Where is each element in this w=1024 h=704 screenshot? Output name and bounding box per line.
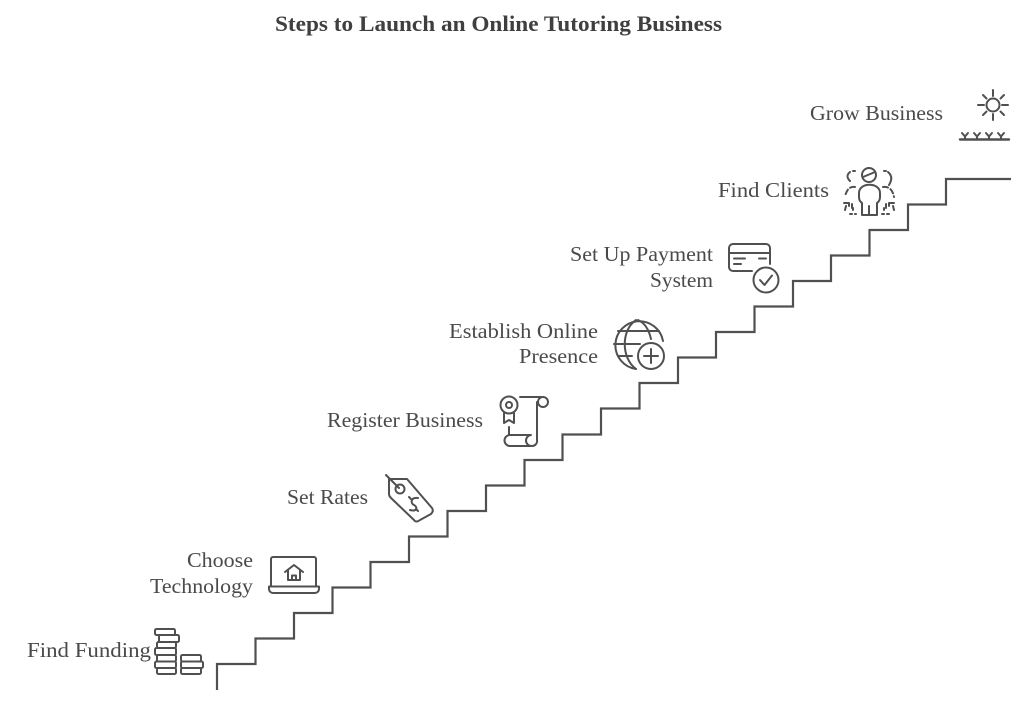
label: Establish Online Presence: Establish Online — [449, 319, 598, 343]
label: Set Up Payment System: Set Up Payment — [570, 242, 713, 266]
step: Set Rates — [287, 475, 433, 522]
staircase — [217, 179, 1011, 690]
label: Set Rates: Set Rates — [287, 485, 368, 509]
icon: laptop with house — [269, 557, 319, 593]
step: Choose Technology — [150, 548, 319, 598]
label: Choose Technology: Technology — [150, 574, 254, 598]
label: Find Clients: Find Clients — [718, 178, 829, 202]
label: Register Business: Register Business — [327, 408, 483, 432]
icon: price tag — [386, 475, 433, 522]
icon: credit card with check — [729, 244, 778, 292]
step: Register Business — [327, 396, 548, 446]
label: Set Up Payment System: System — [650, 268, 713, 292]
icon: certificate scroll — [500, 396, 548, 446]
icon: coin stacks — [155, 629, 203, 674]
label: Choose Technology: Choose — [187, 548, 253, 572]
label: Grow Business: Grow Business — [810, 101, 943, 125]
icon: people group — [844, 168, 894, 215]
title: Steps to Launch an Online Tutoring Business — [275, 11, 722, 36]
label: Find Funding: Find Funding — [27, 638, 152, 662]
label: Establish Online Presence: Presence — [519, 344, 598, 368]
step: Find Funding — [27, 629, 203, 674]
icon: sun over grass — [960, 90, 1009, 140]
step: Establish Online Presence — [449, 319, 664, 369]
step: Set Up Payment System — [570, 242, 778, 292]
icon: globe with plus — [614, 320, 664, 369]
step: Grow Business — [810, 90, 1009, 140]
step: Find Clients — [718, 168, 894, 215]
